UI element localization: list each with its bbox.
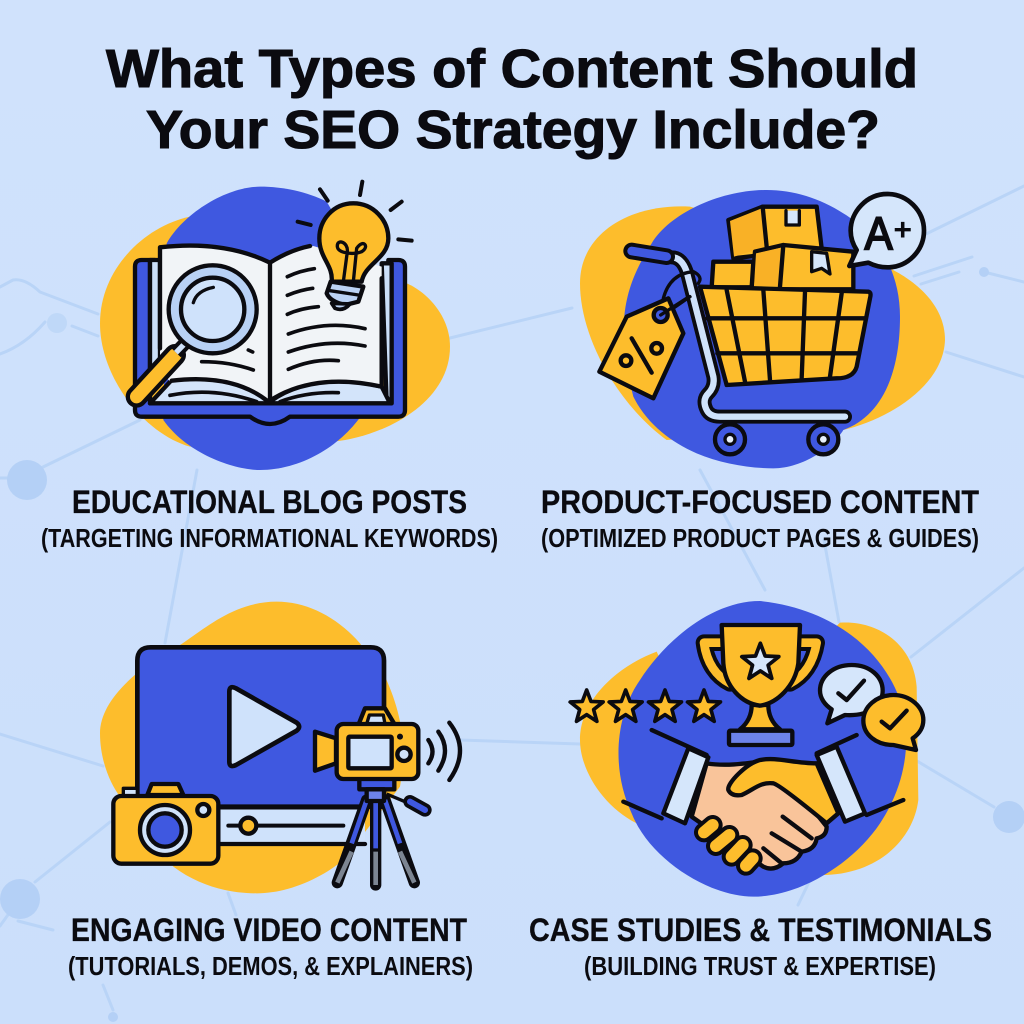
panel: product-focused content icon xyxy=(580,190,945,468)
title: What Types of Content Should xyxy=(106,39,918,99)
speech bubbles with checks xyxy=(820,665,923,750)
open book xyxy=(135,246,405,424)
yellow blob xyxy=(100,217,450,447)
video camera xyxy=(315,708,460,780)
yellow blob xyxy=(100,602,403,893)
yellow blob xyxy=(580,206,945,440)
title: Your SEO Strategy Include? xyxy=(146,100,880,160)
caption: product-focused content xyxy=(541,484,979,553)
caption: engaging video content: ENGAGING VIDEO CONTENT xyxy=(71,912,467,948)
caption: educational blog posts xyxy=(41,484,498,553)
speech bubble A+: + xyxy=(893,213,912,247)
caption: product-focused content: PRODUCT-FOCUSED CONTENT xyxy=(541,484,979,520)
caption: case studies and testimonials: (BUILDING TRUST & EXPERTISE) xyxy=(584,951,936,981)
panel: educational blog posts icon xyxy=(100,182,450,470)
cardboard boxes xyxy=(712,207,853,289)
caption: educational blog posts: (TARGETING INFORMATIONAL KEYWORDS) xyxy=(41,523,498,553)
speech bubble A+: A xyxy=(865,207,893,259)
blue blob xyxy=(618,601,906,897)
blue blob xyxy=(624,190,900,468)
trophy xyxy=(704,625,817,745)
light bulb xyxy=(298,182,412,309)
tripod xyxy=(337,778,425,885)
magnifying glass xyxy=(137,265,257,397)
panel: engaging video content icon xyxy=(100,602,460,893)
caption: educational blog posts: EDUCATIONAL BLOG POSTS xyxy=(72,484,467,520)
panel: case studies and testimonials icon xyxy=(570,601,923,897)
four rating stars xyxy=(570,690,720,721)
speech bubble A+ xyxy=(849,194,924,267)
video screen xyxy=(137,647,384,844)
caption: engaging video content xyxy=(68,912,473,981)
caption: case studies and testimonials xyxy=(529,912,992,981)
blue blob xyxy=(163,187,367,470)
handshake xyxy=(623,730,903,869)
title xyxy=(106,39,918,160)
yellow blobs xyxy=(580,622,918,875)
caption: engaging video content: (TUTORIALS, DEMOS, & EXPLAINERS) xyxy=(68,951,473,981)
photo camera xyxy=(113,784,218,864)
shopping cart xyxy=(632,251,871,454)
price tag xyxy=(599,272,700,398)
